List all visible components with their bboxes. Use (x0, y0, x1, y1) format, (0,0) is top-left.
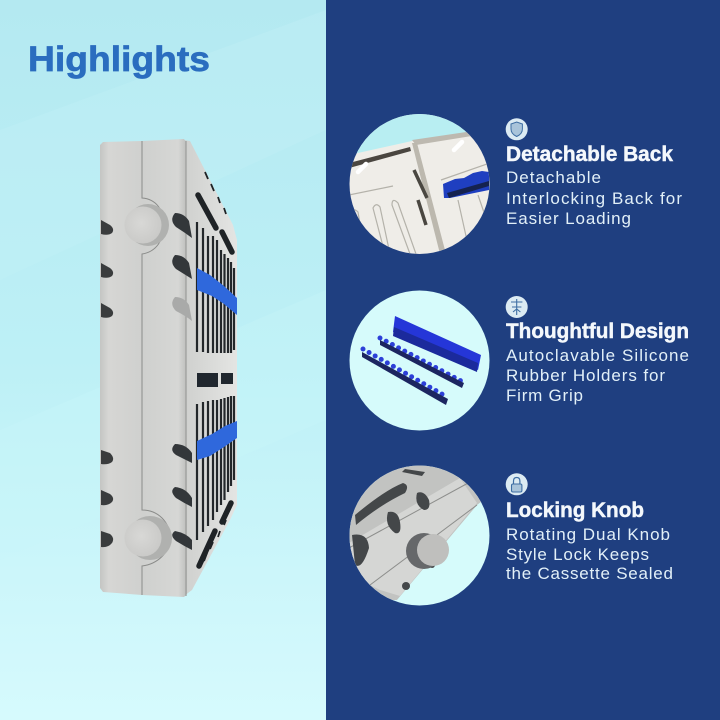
panel: right background (326, 0, 720, 720)
circle photo: detachable back (349, 113, 490, 255)
description: thoughtful design (506, 346, 689, 405)
description: locking knob: Style Lock Keeps (506, 545, 649, 564)
feature: detachable back (349, 113, 682, 255)
feature: locking knob (349, 465, 673, 607)
cassette side face (184, 140, 237, 596)
description: thoughtful design: Rubber Holders for (506, 366, 665, 385)
heading: detachable back: Detachable Back (506, 143, 673, 166)
right edge slots (172, 213, 192, 550)
cassette seam (142, 141, 170, 595)
description: detachable back (506, 168, 682, 228)
description: thoughtful design: Autoclavable Silicone (506, 346, 689, 365)
icon: padlock (506, 473, 528, 495)
upper locking knob (124, 204, 169, 246)
panel: left background (0, 0, 326, 720)
description: locking knob: the Cassette Sealed (506, 564, 673, 583)
circle photo: locking knob (349, 465, 490, 607)
lower locking knob (124, 516, 172, 560)
cassette front face (100, 139, 187, 597)
heading: thoughtful design: Thoughtful Design (506, 320, 689, 343)
lower blue silicone holder (197, 421, 237, 460)
description: locking knob (506, 525, 673, 583)
product: instrument cassette (100, 139, 237, 597)
description: thoughtful design: Firm Grip (506, 386, 583, 405)
icon: shield (506, 118, 528, 140)
circle photo: silicone holders (349, 290, 490, 432)
description: detachable back: Detachable (506, 168, 601, 187)
left edge slots (101, 220, 113, 547)
description: locking knob: Rotating Dual Knob (506, 525, 670, 544)
description: detachable back: Interlocking Back for (506, 189, 682, 208)
description: detachable back: Easier Loading (506, 209, 631, 228)
icon: design tool (506, 296, 528, 318)
feature: thoughtful design (349, 290, 689, 432)
upper blue silicone holder (197, 268, 237, 315)
heading: locking knob: Locking Knob (506, 499, 644, 522)
title: Highlights (28, 40, 210, 79)
